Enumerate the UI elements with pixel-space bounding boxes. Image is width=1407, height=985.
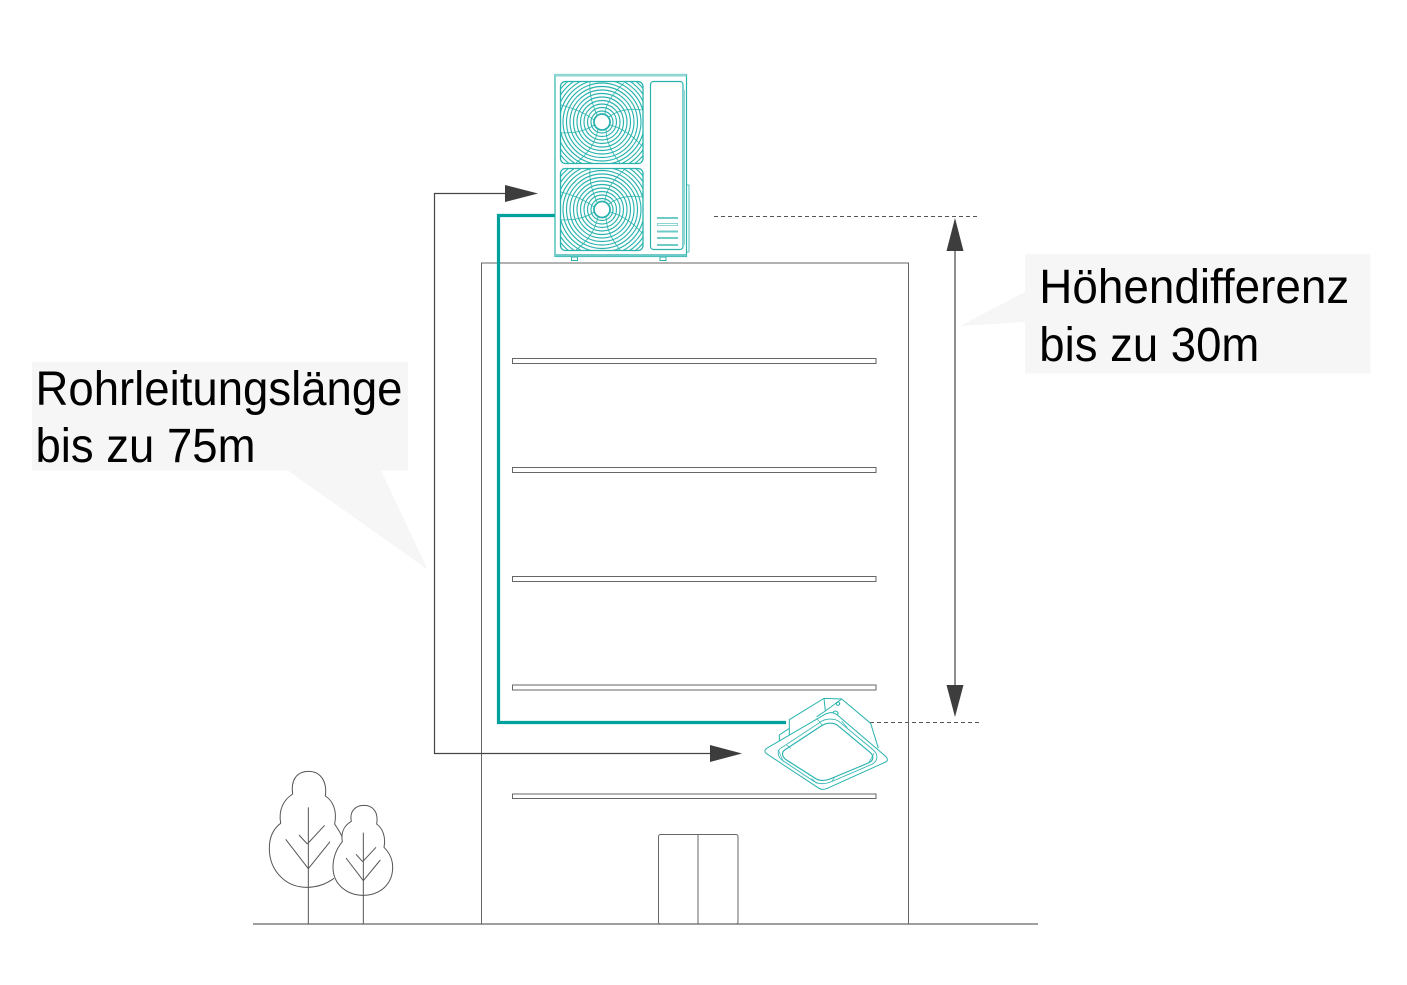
callout: height difference: Höhendifferenz [1039, 261, 1349, 314]
callout: height difference: bis zu 30m [1039, 319, 1259, 372]
dashed reference lines [714, 216, 980, 722]
icon: outdoor unit [554, 74, 690, 261]
icon: cassette indoor unit [765, 698, 887, 789]
ground line [253, 923, 1038, 925]
refrigerant pipe [498, 216, 786, 722]
arrow: height difference [946, 218, 964, 717]
callout: height difference [960, 254, 1370, 374]
arrow: pipe length route [434, 185, 742, 762]
tree: large [269, 771, 342, 924]
side panel [650, 82, 684, 250]
building [482, 263, 908, 924]
louvers [657, 218, 678, 245]
tree: small [333, 805, 393, 924]
fan grille bottom [560, 168, 644, 252]
panel [765, 713, 887, 789]
fan grille top [560, 80, 644, 164]
callout: pipe length [32, 362, 428, 570]
door [658, 834, 738, 924]
callout: pipe length: Rohrleitungslänge [36, 363, 402, 416]
trees [269, 771, 393, 924]
feet [572, 257, 666, 260]
callout: pipe length: bis zu 75m [36, 420, 256, 473]
floor slabs [512, 358, 876, 798]
